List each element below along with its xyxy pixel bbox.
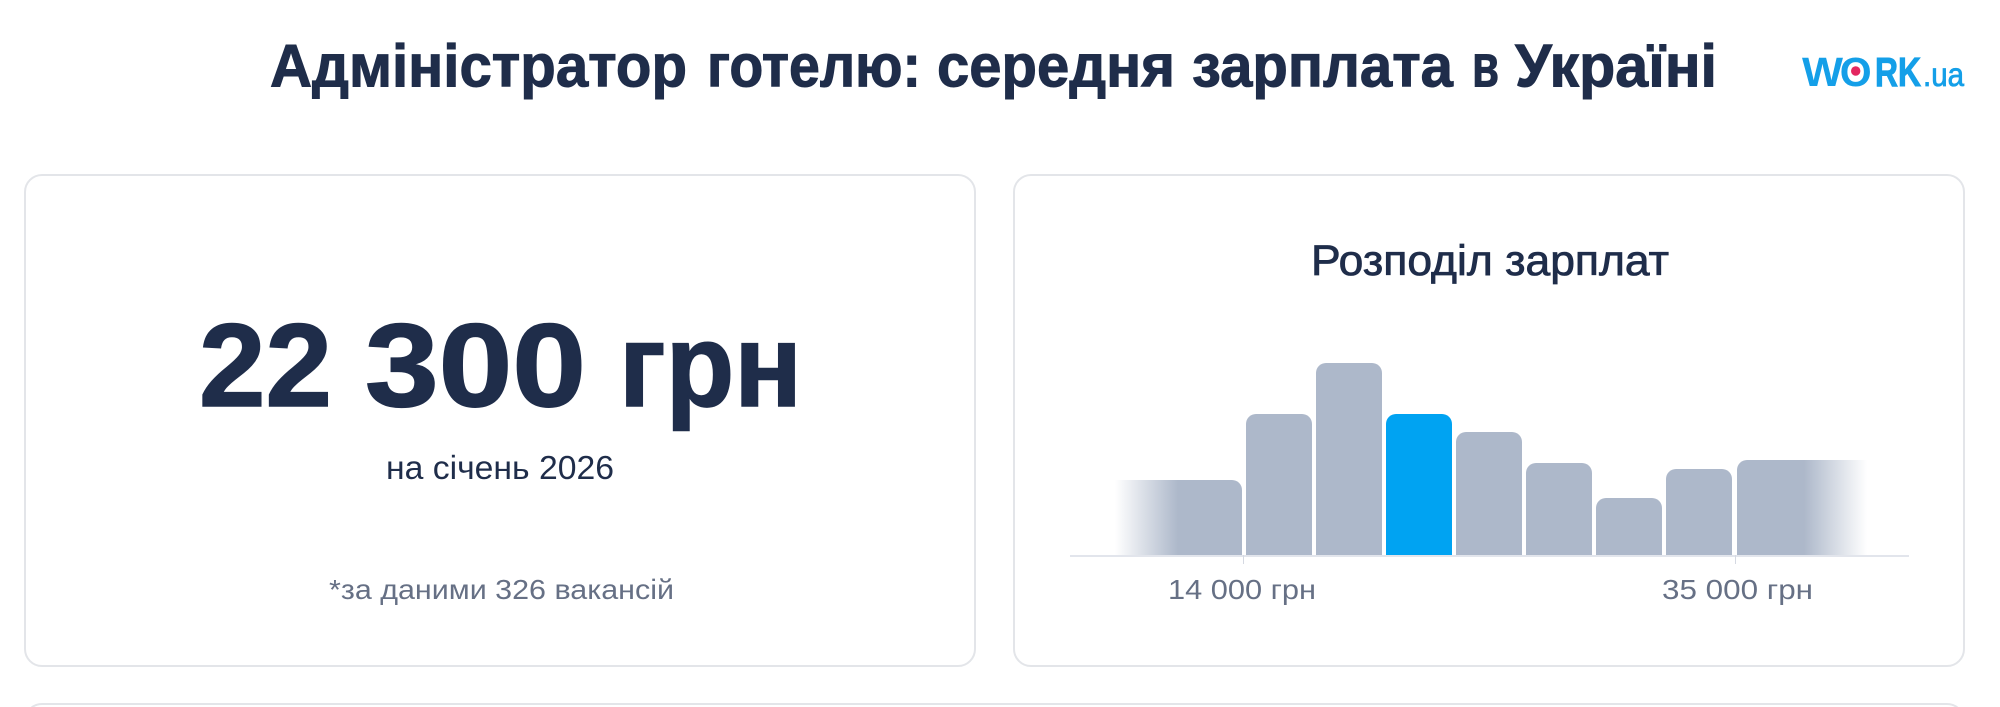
title: Україні [1515, 32, 1717, 100]
title [270, 32, 1717, 100]
logo: WORK.ua: .ua [1923, 56, 1965, 93]
panel: salary distribution [1014, 175, 1964, 666]
logo: WORK.ua: RK [1875, 49, 1921, 95]
panel: average salary [25, 175, 975, 666]
date caption: на січень 2026 [386, 449, 614, 486]
big salary number: 300 [365, 300, 586, 432]
distribution heading: Розподіл зарплат [1311, 237, 1669, 285]
source note: *за даними 326 вакансій [329, 574, 674, 605]
histogram [1070, 363, 1909, 564]
axis label: minimum: 14 000 грн [1168, 574, 1316, 605]
big salary number [199, 300, 802, 432]
title: в [1472, 32, 1499, 100]
logo: WORK.ua: O [1840, 49, 1872, 95]
title: готелю: [707, 32, 921, 100]
panel: next card, clipped [25, 704, 1964, 707]
logo: WORK.ua [1802, 49, 1965, 95]
highlighted bar [1386, 414, 1452, 555]
title: Адміністратор [270, 32, 687, 100]
logo: WORK.ua: W [1802, 49, 1843, 95]
title: середня [937, 32, 1175, 100]
big salary number: 22 [199, 300, 332, 432]
big salary number: грн [619, 300, 802, 432]
axis label: maximum: 35 000 грн [1662, 574, 1813, 605]
title: зарплата [1192, 32, 1454, 100]
